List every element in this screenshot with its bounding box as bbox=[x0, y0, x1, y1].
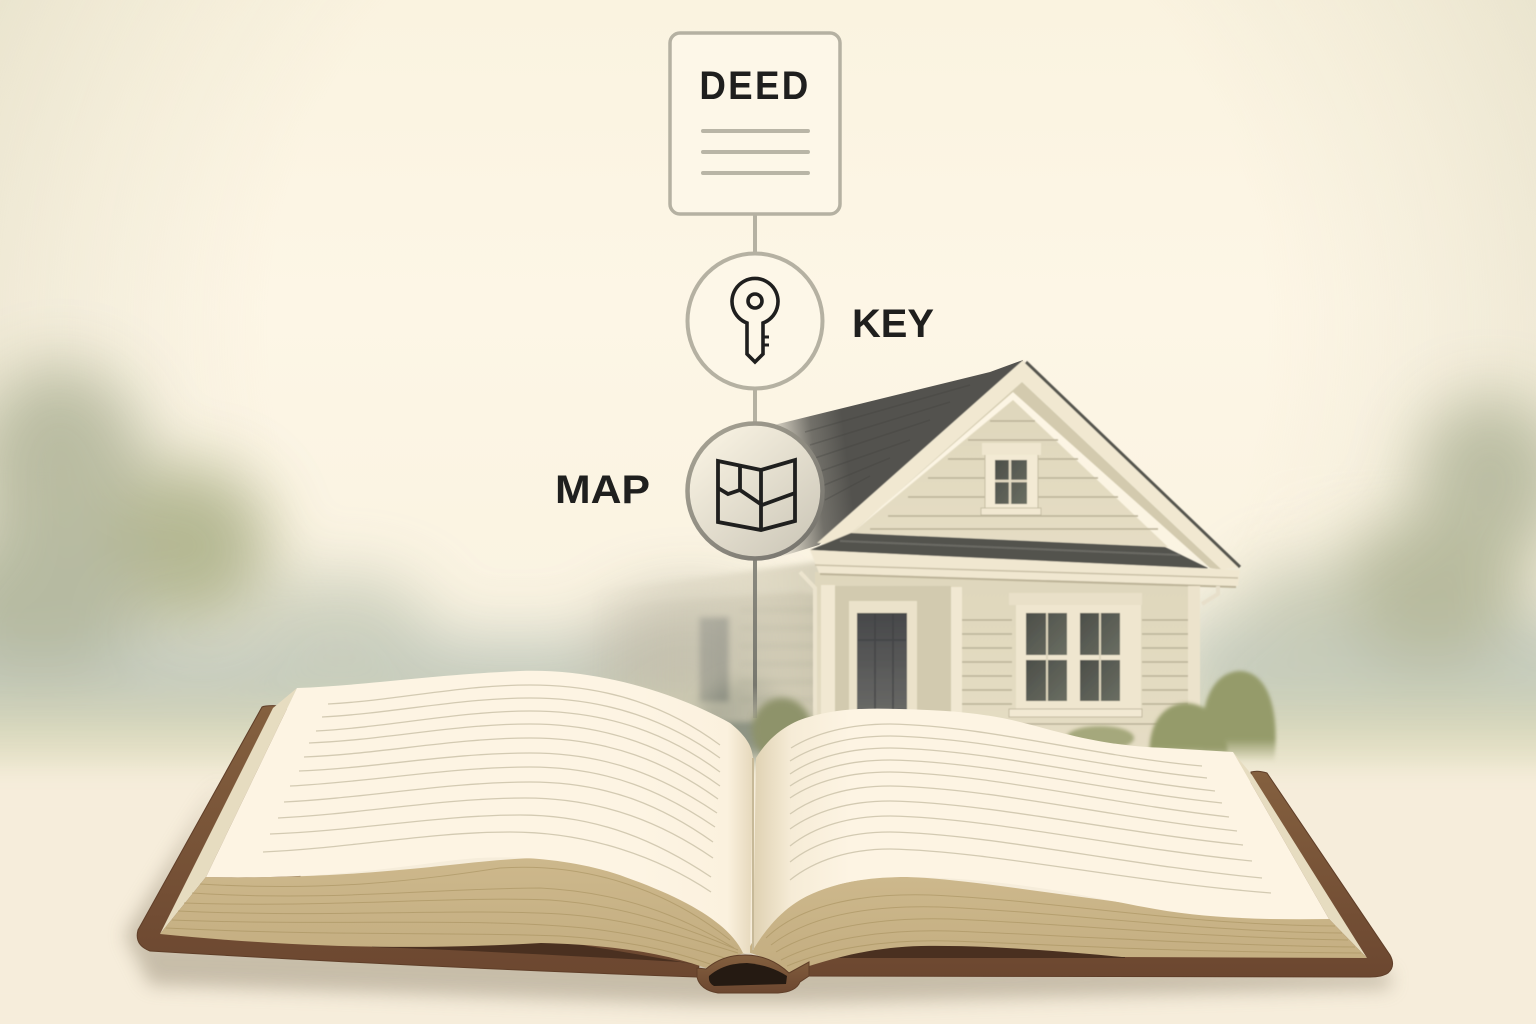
vertical connector bbox=[753, 214, 757, 718]
key node bbox=[688, 254, 822, 388]
gable wall bbox=[852, 400, 1168, 547]
map node bbox=[688, 424, 822, 558]
left page rules bbox=[263, 685, 720, 892]
wall bbox=[816, 575, 1188, 722]
porch bbox=[821, 585, 962, 725]
siding bbox=[962, 619, 1188, 725]
front door bbox=[857, 613, 907, 718]
right page rules bbox=[790, 724, 1271, 893]
left cover bbox=[137, 706, 705, 977]
gable trim bbox=[817, 360, 1240, 570]
gable siding bbox=[870, 421, 1158, 529]
hazy dip behind the book gutter bbox=[700, 680, 790, 760]
gaps under the page blocks bbox=[372, 938, 1125, 966]
book shadow bbox=[125, 780, 1390, 1004]
icon: key bbox=[732, 278, 778, 362]
front window bbox=[1009, 593, 1142, 717]
right cover bbox=[800, 771, 1393, 977]
main roof bbox=[770, 360, 1023, 560]
spine bbox=[697, 955, 809, 993]
corner post and gutters bbox=[800, 572, 1218, 721]
left page block bbox=[160, 858, 745, 968]
ground plane bbox=[0, 776, 1536, 1024]
fascia bbox=[810, 550, 1240, 586]
right page edge bbox=[1233, 752, 1367, 958]
gable window bbox=[981, 443, 1041, 515]
key label: KEY bbox=[852, 302, 934, 346]
deed document card bbox=[670, 33, 840, 214]
map label: MAP bbox=[555, 468, 650, 512]
right page block strata bbox=[766, 895, 1361, 966]
left page edge bbox=[160, 688, 297, 934]
house bbox=[690, 360, 1242, 726]
background bbox=[0, 0, 1536, 482]
blurred landscape: trees, haze and ground bbox=[0, 365, 1536, 1024]
icon: folded map bbox=[718, 460, 795, 530]
deed heading: DEED bbox=[699, 64, 811, 108]
open book bbox=[125, 671, 1393, 1004]
shrubs bbox=[752, 671, 1276, 762]
left page bbox=[206, 671, 753, 953]
faded left wing bbox=[690, 560, 818, 724]
left page block strata bbox=[166, 867, 738, 964]
right page block bbox=[747, 877, 1367, 973]
right page bbox=[753, 709, 1329, 950]
spine crease bbox=[752, 758, 754, 950]
deed text lines bbox=[703, 131, 808, 173]
lower roof band bbox=[810, 533, 1208, 570]
